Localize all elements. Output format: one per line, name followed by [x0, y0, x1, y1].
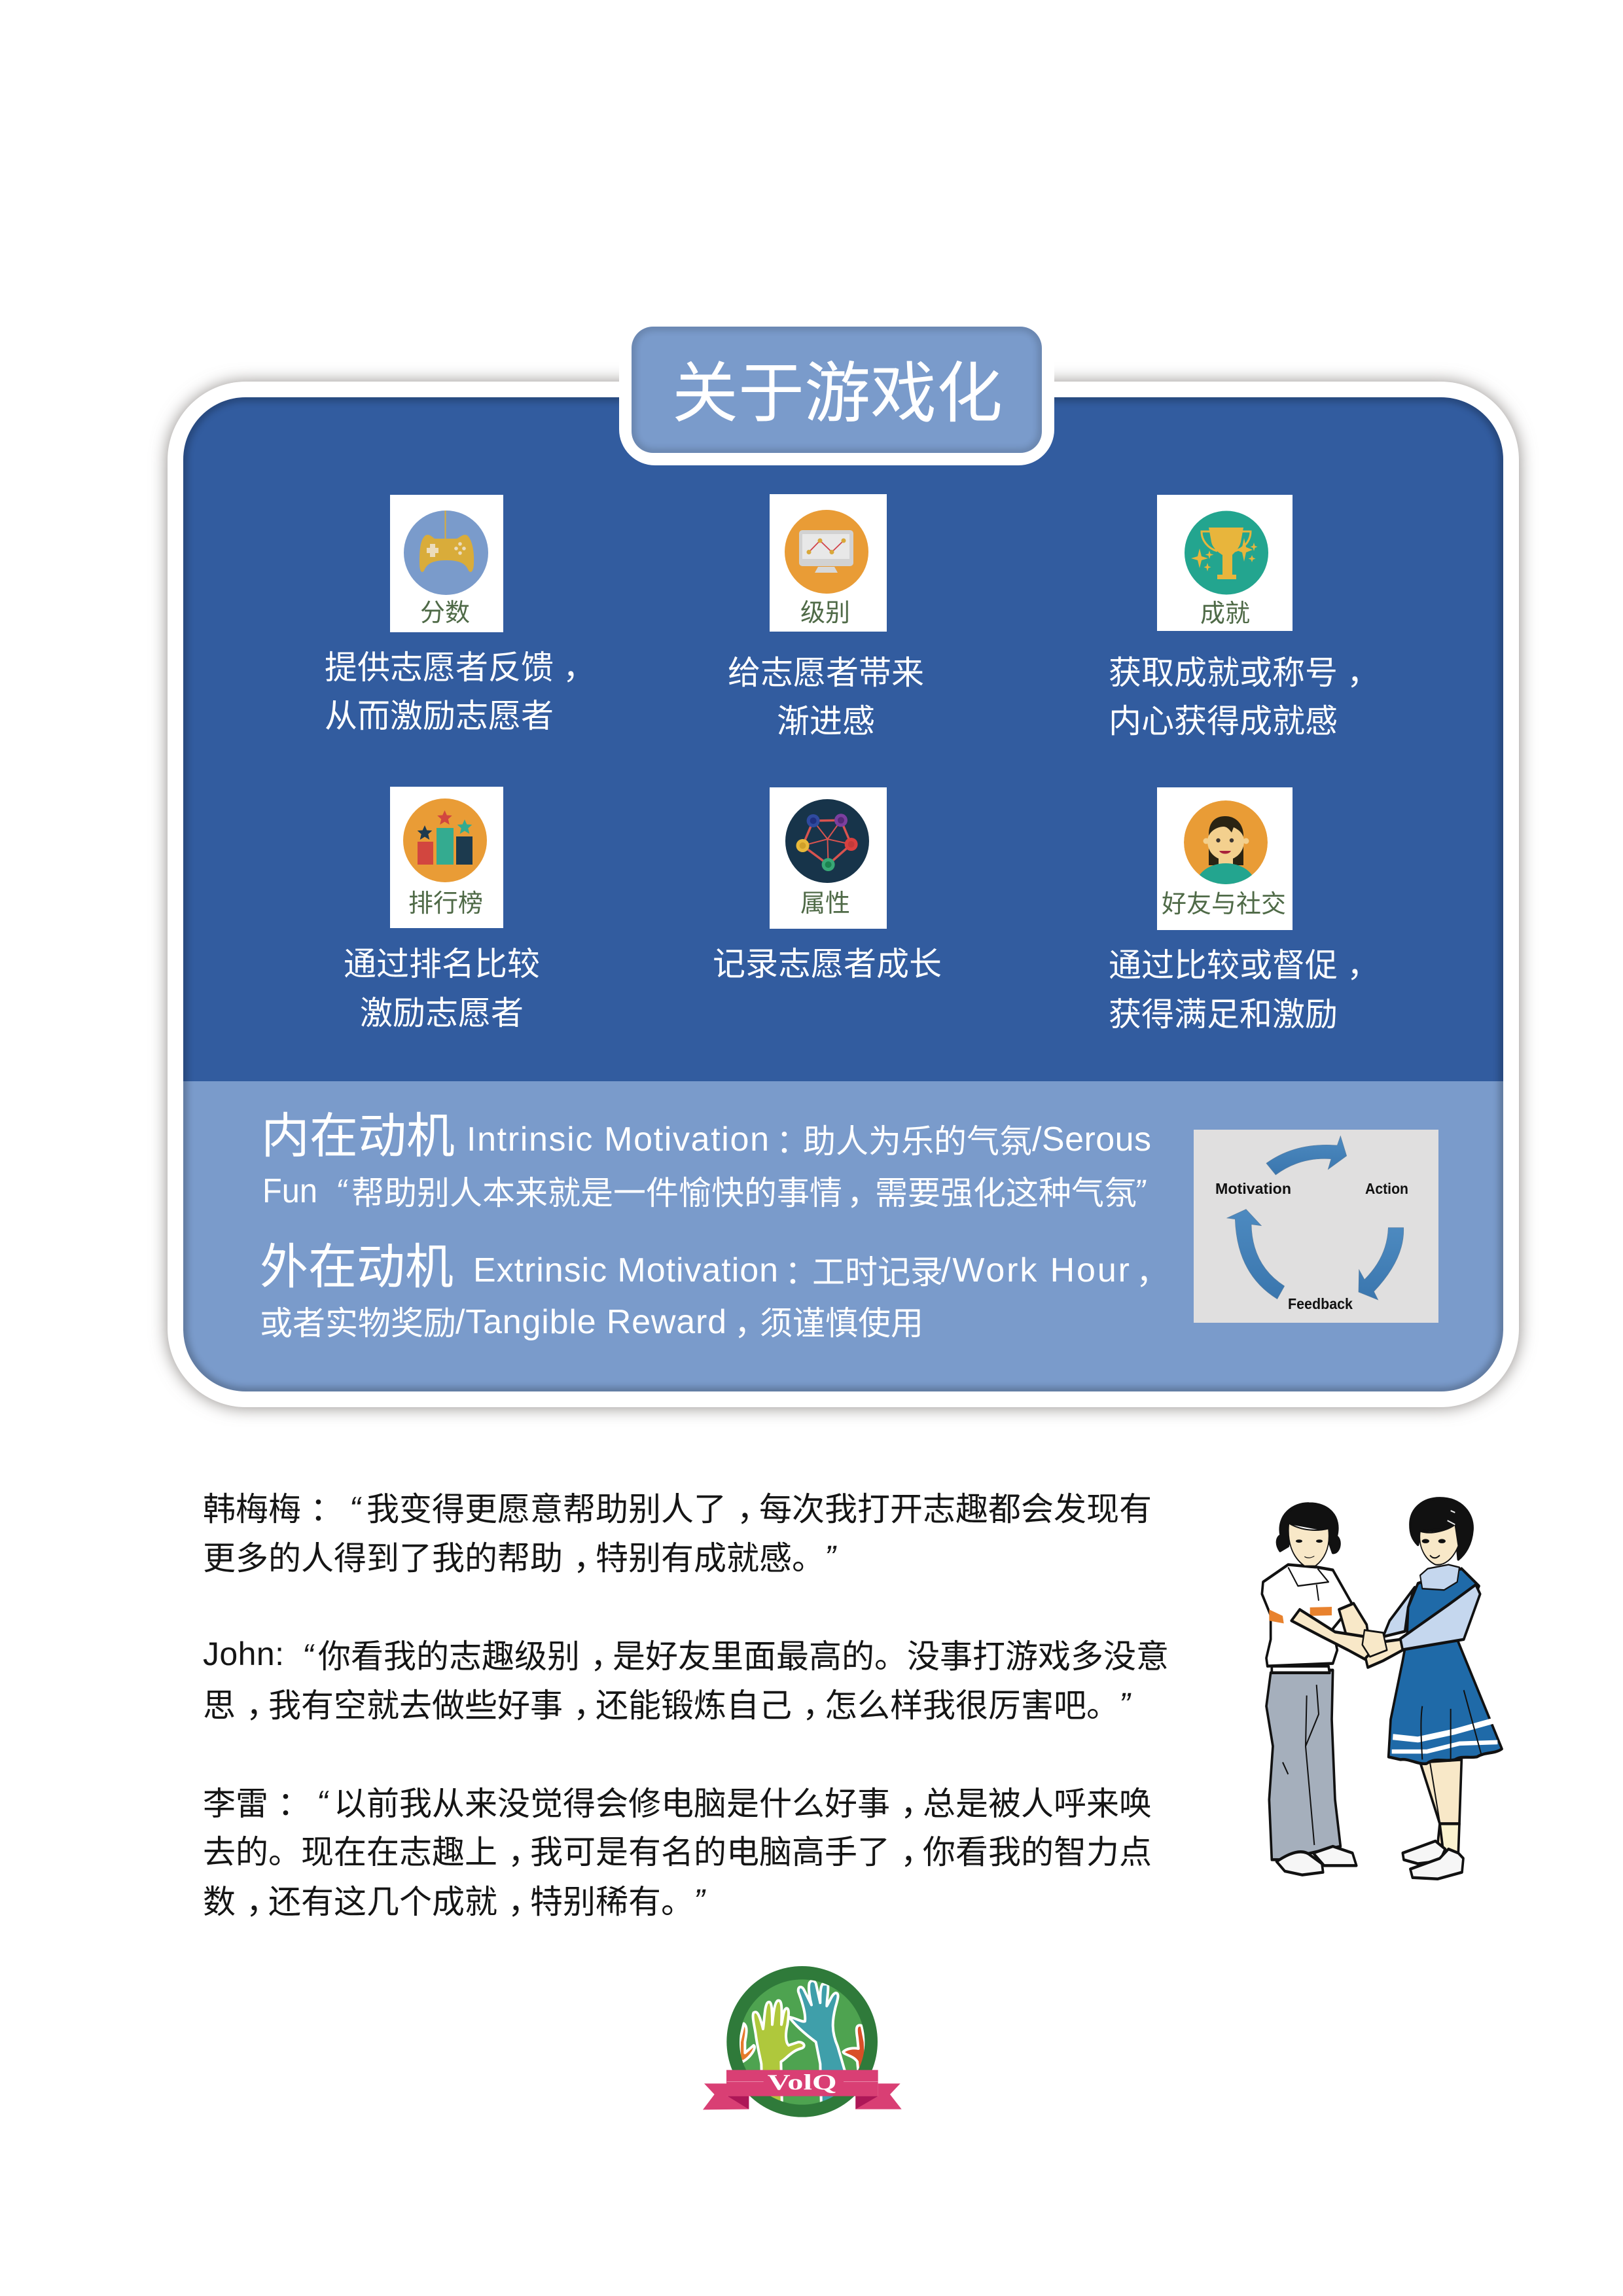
item: achievement: 获取成就或称号 — [1109, 655, 1338, 691]
item: achievement: 成就 — [1200, 600, 1250, 628]
item: achievement: ， — [1347, 655, 1380, 691]
quote: John: ， — [573, 1687, 606, 1724]
item: attributes: 属性 — [800, 890, 850, 918]
quote: John: ” — [1119, 1686, 1132, 1723]
text: intrinsic motivation: “ — [336, 1173, 348, 1210]
item: friends and social — [1110, 787, 1357, 1029]
text: extrinsic motivation: ： — [785, 1254, 817, 1291]
item: leaderboard — [344, 787, 540, 1031]
arrow: action to feedback — [1359, 1228, 1404, 1300]
ribbon: VolQ — [768, 2071, 837, 2095]
ribbon — [703, 2070, 902, 2109]
quote: John: 是好友里面最高的。没事打游戏多没意 — [613, 1638, 1169, 1675]
text: intrinsic motivation: 需要强化这种气氛 — [875, 1175, 1137, 1211]
quote: Li Lei: 特别稀有。 — [530, 1884, 694, 1920]
quote: Han Meimei: 韩梅梅 — [203, 1491, 301, 1528]
icon: trophy — [1185, 511, 1268, 594]
text: intrinsic motivation: Fun — [262, 1172, 317, 1210]
quote: John: ， — [590, 1638, 623, 1675]
item: level: 给志愿者帯来 — [728, 655, 924, 691]
text: extrinsic motivation: ， — [734, 1305, 767, 1342]
icon: network — [785, 799, 869, 883]
text: intrinsic motivation: /Serous — [1032, 1121, 1151, 1158]
icon: bars and stars — [403, 798, 487, 882]
quote: Li Lei: ， — [508, 1884, 541, 1920]
quote: Han Meimei: 每次我打开志趣都会发现有 — [759, 1491, 1152, 1528]
item: level: 级别 — [800, 600, 850, 627]
quote: Han Meimei: ” — [825, 1539, 837, 1575]
quote: John: 思 — [203, 1687, 236, 1724]
quote: John: 你看我的志趣级别 — [318, 1638, 580, 1675]
quote: Han Meimei: ， — [573, 1540, 606, 1577]
text: extrinsic motivation: ， — [1136, 1254, 1169, 1291]
text: extrinsic motivation: 须谨慎使用 — [760, 1305, 923, 1342]
quote: John: “ — [302, 1638, 315, 1674]
text: extrinsic motivation: Extrinsic Motivation — [473, 1251, 778, 1289]
illustration: two people shaking hands — [1262, 1498, 1502, 1879]
chart: motivation action feedback cycle — [1194, 1130, 1438, 1323]
item: friends and social: 获得满足和激励 — [1109, 996, 1338, 1033]
quote: Han Meimei: ： — [310, 1491, 343, 1528]
icon: raised hands — [740, 1981, 866, 2108]
woman — [1363, 1498, 1502, 1879]
quote: Li Lei: 数 — [203, 1884, 236, 1920]
item: level — [728, 494, 924, 740]
logo: VolQ — [703, 1966, 902, 2117]
quote: Li Lei: 你看我的智力点 — [923, 1834, 1152, 1871]
quote: Li Lei: ， — [901, 1785, 933, 1822]
chart: motivation action feedback cycle: Motivation — [1215, 1180, 1291, 1197]
item: level: 渐进感 — [777, 703, 875, 740]
item: attributes — [713, 787, 942, 982]
item: score: 提供志愿者反馈 — [325, 649, 554, 686]
text: extrinsic motivation: 或者实物奖励 — [260, 1305, 456, 1342]
item: score — [325, 495, 596, 734]
quote: Han Meimei — [203, 1490, 1152, 1577]
text: extrinsic motivation: 工时记录 — [812, 1254, 943, 1291]
item: score: 从而激励志愿者 — [325, 698, 554, 734]
quote: John — [203, 1636, 1169, 1724]
quote: Li Lei: 去的。现在在志趣上 — [203, 1834, 497, 1871]
quote: Li Lei: ： — [277, 1785, 310, 1822]
text: extrinsic motivation — [260, 1240, 1169, 1342]
quote: Han Meimei: 更多的人得到了我的帮助 — [203, 1540, 563, 1577]
quote: John: 我有空就去做些好事 — [268, 1687, 563, 1724]
text: intrinsic motivation: 帮助别人本来就是一件愉快的事情 — [351, 1175, 842, 1211]
title tab — [619, 327, 1054, 465]
quote: Li Lei: ， — [901, 1834, 933, 1871]
quote: Han Meimei: 我变得更愿意帮助别人了 — [366, 1491, 726, 1528]
item: achievement: 内心获得成就感 — [1109, 703, 1338, 740]
icon: person — [1184, 800, 1268, 884]
quote: John: ， — [802, 1687, 835, 1724]
panel: about gamification — [168, 327, 1519, 1407]
quote: John: John: — [203, 1636, 284, 1672]
quote: Li Lei: 李雷 — [203, 1785, 268, 1822]
item: friends and social: ， — [1347, 947, 1380, 984]
title tab: 关于游戏化 — [672, 357, 1003, 431]
quote: Li Lei: 我可是有名的电脑高手了 — [530, 1834, 890, 1871]
quote: John: ， — [246, 1687, 279, 1724]
text: extrinsic motivation: 外在动机 — [260, 1240, 454, 1294]
quote: John: 还能锻炼自己 — [596, 1687, 792, 1724]
item: leaderboard: 激励志愿者 — [360, 995, 524, 1031]
text: extrinsic motivation: /Tangible Reward — [455, 1303, 726, 1341]
quote: Li Lei: 还有这几个成就 — [268, 1884, 497, 1920]
text: intrinsic motivation — [261, 1109, 1151, 1211]
item: leaderboard: 排行榜 — [408, 890, 483, 918]
quote: Li Lei: 总是被人呼来唤 — [923, 1785, 1152, 1822]
quote: Han Meimei: 特别有成就感。 — [596, 1540, 825, 1577]
arrow: motivation to action — [1266, 1136, 1347, 1175]
text: intrinsic motivation: ， — [847, 1175, 880, 1211]
item: score: ， — [563, 649, 596, 686]
icon: game controller — [404, 511, 488, 595]
item: friends and social: 好友与社交 — [1162, 891, 1286, 918]
text: intrinsic motivation: ” — [1134, 1173, 1147, 1210]
text: intrinsic motivation: 内在动机 — [261, 1109, 455, 1163]
quote: Han Meimei: “ — [349, 1490, 362, 1527]
arrow: feedback to motivation — [1227, 1210, 1285, 1299]
text: extrinsic motivation: /Work Hour — [941, 1251, 1130, 1289]
text: intrinsic motivation: Intrinsic Motivation — [467, 1121, 769, 1158]
quote: Li Lei: 以前我从来没觉得会修电脑是什么好事 — [334, 1785, 890, 1822]
quote: Li Lei: ， — [508, 1834, 541, 1871]
icon: monitor chart — [785, 510, 868, 594]
item: achievement — [1109, 495, 1380, 740]
chart: motivation action feedback cycle: Action — [1365, 1180, 1408, 1197]
item: friends and social: 通过比较或督促 — [1109, 947, 1338, 984]
quote: Li Lei: ” — [694, 1882, 706, 1919]
man — [1262, 1504, 1386, 1875]
quote: John: 怎么样我很厉害吧。 — [825, 1687, 1119, 1724]
text: intrinsic motivation: ： — [776, 1123, 809, 1160]
item: leaderboard: 通过排名比较 — [344, 946, 540, 982]
quote: Han Meimei: ， — [737, 1491, 770, 1528]
chart: motivation action feedback cycle: Feedback — [1288, 1295, 1353, 1312]
item: attributes: 记录志愿者成长 — [713, 946, 942, 982]
quote: Li Lei: “ — [317, 1784, 329, 1821]
item: score: 分数 — [420, 600, 470, 627]
quote: Li Lei: ， — [246, 1884, 279, 1920]
quote: Li Lei — [203, 1784, 1152, 1920]
text: intrinsic motivation: 助人为乐的气氛 — [803, 1123, 1032, 1160]
